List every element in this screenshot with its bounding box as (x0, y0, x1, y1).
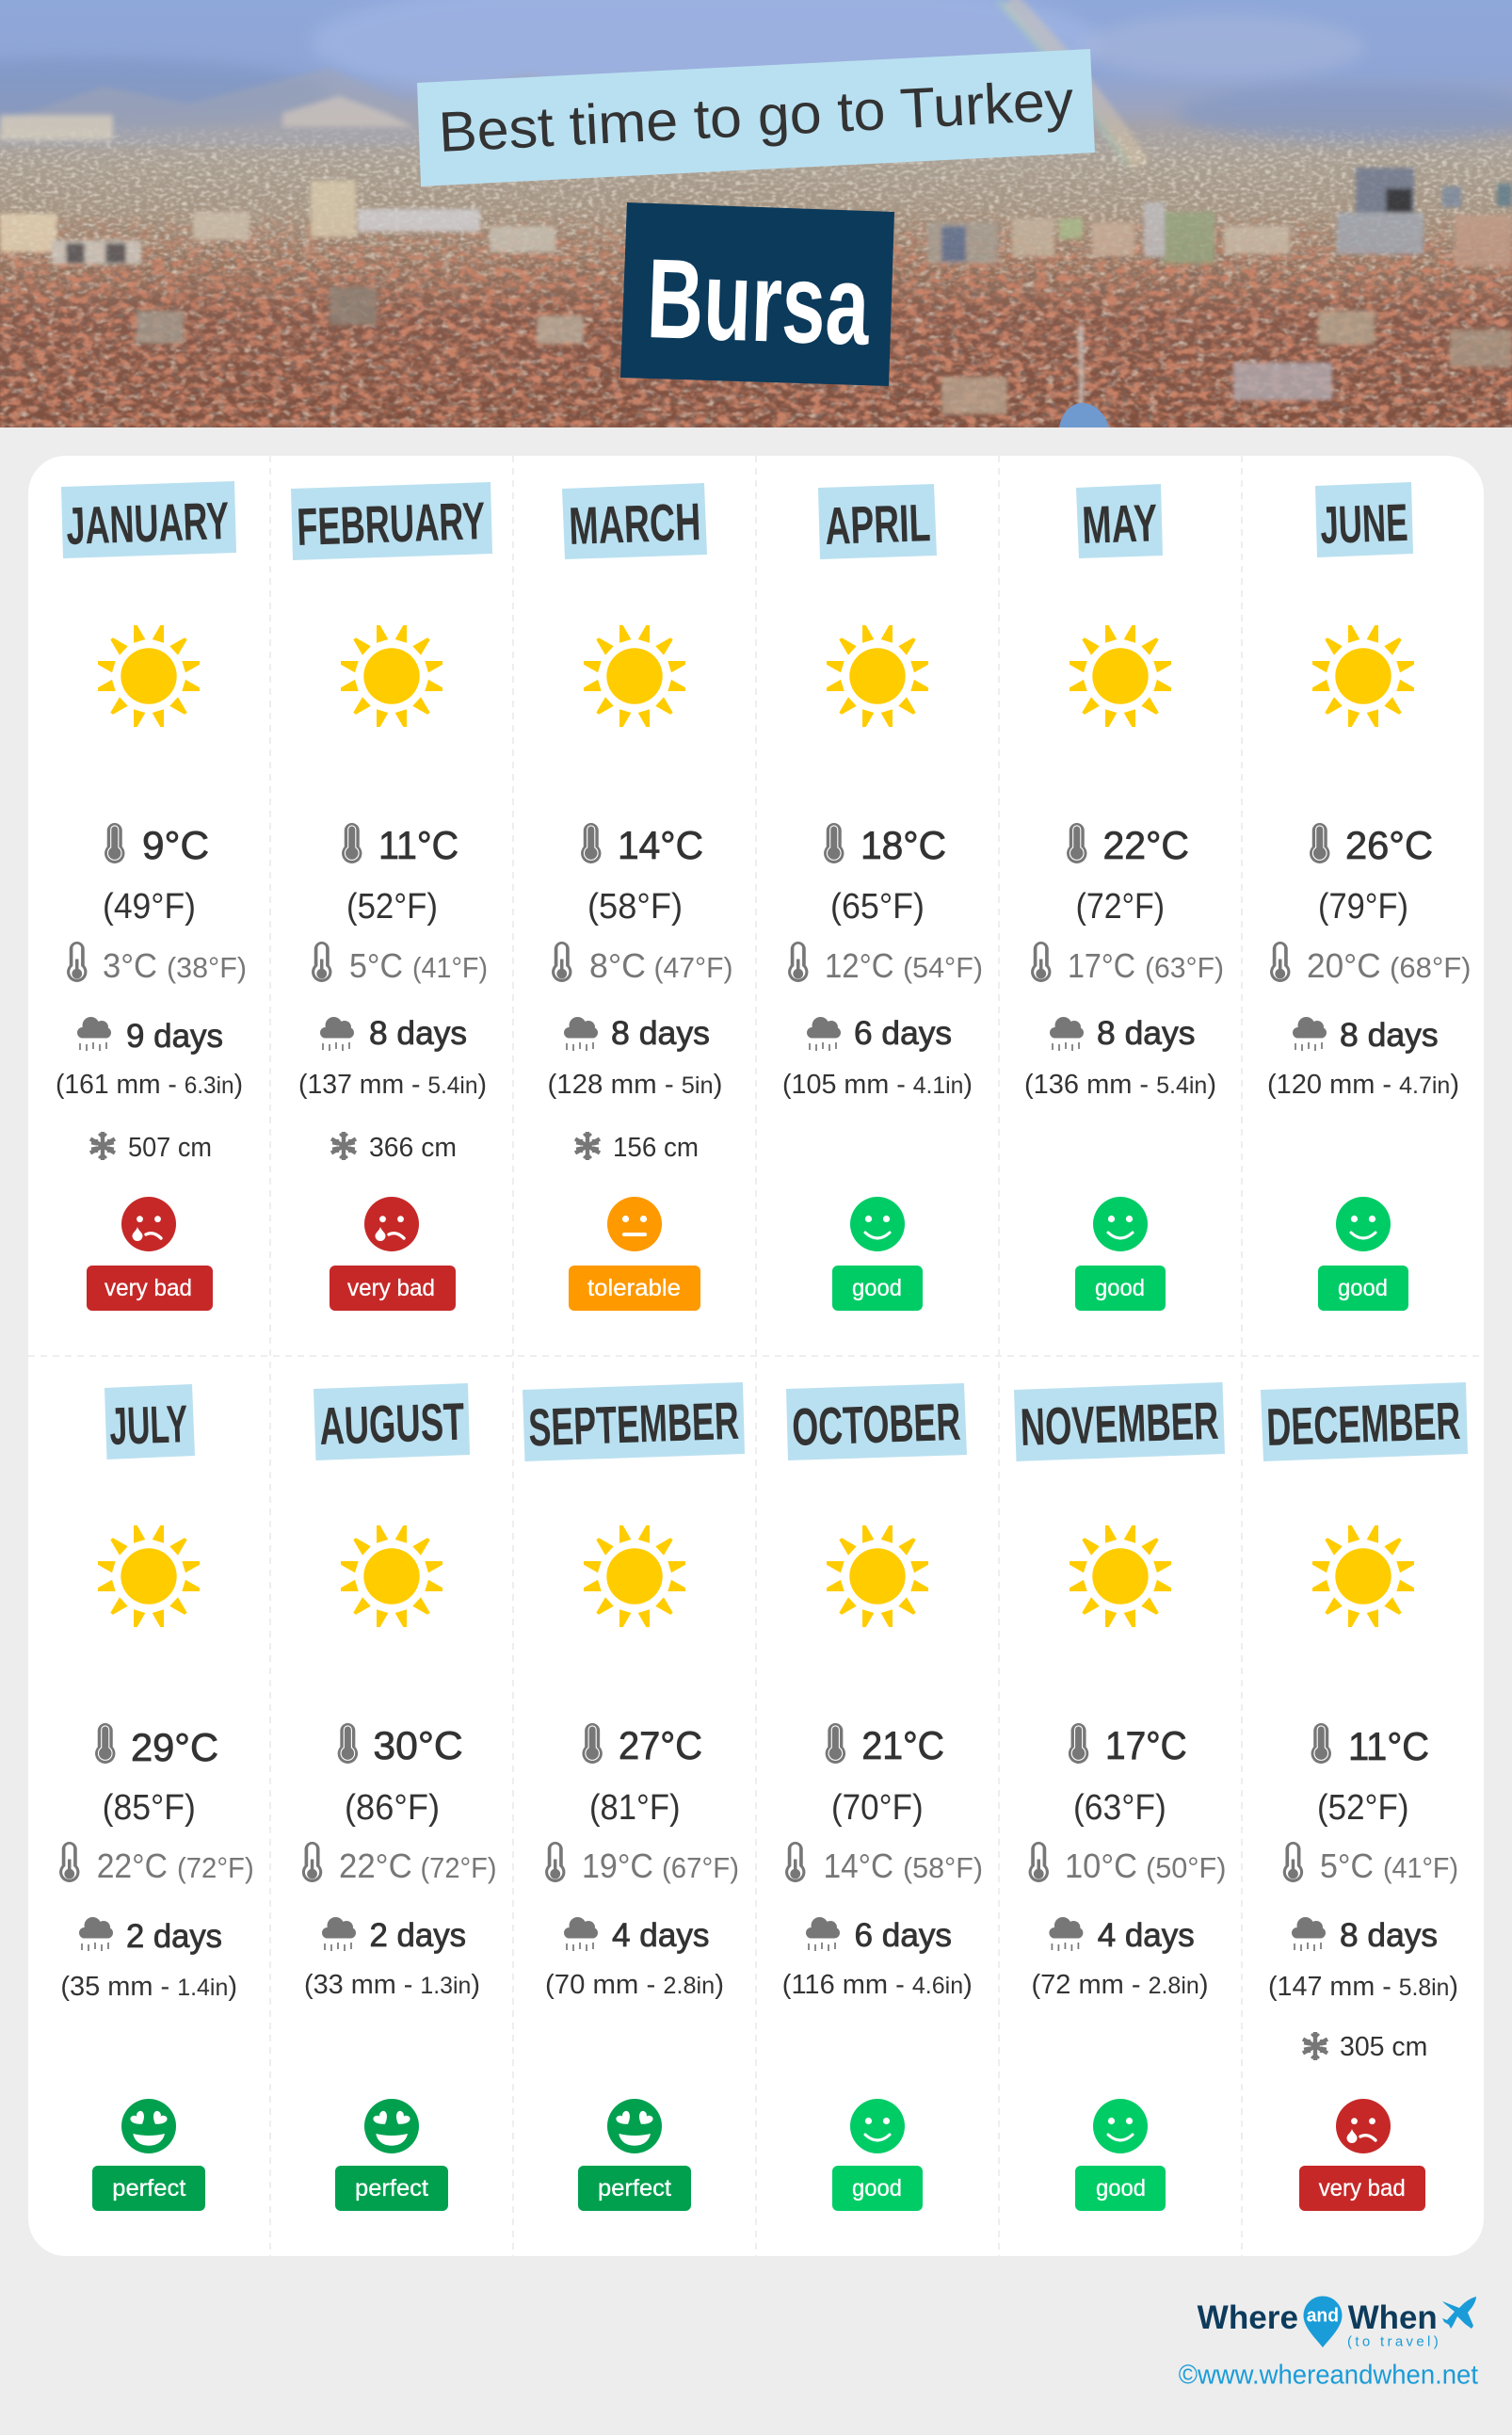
logo: Where and When: When (1348, 2299, 1438, 2336)
month label (61, 481, 236, 558)
high temperature fahrenheit: (86°F) (345, 1788, 440, 1828)
icon: thermometer low (545, 1842, 565, 1882)
icon: sun (584, 1525, 685, 1627)
icon: rain cloud (806, 1917, 840, 1951)
icon: heart-eyes face (121, 2099, 176, 2153)
icon: map pin (1303, 2296, 1343, 2347)
rating badge (832, 1266, 923, 1311)
rain days: 2 days (369, 1917, 466, 1954)
icon: sun (1070, 1525, 1171, 1627)
precipitation: (128 mm - 5in) (548, 1070, 723, 1100)
rating badge: good (852, 2175, 902, 2201)
icon: thermometer high (824, 823, 844, 863)
low temperature fahrenheit: (47°F) (653, 951, 732, 984)
rating badge: perfect (598, 2175, 671, 2201)
high temperature fahrenheit: (70°F) (831, 1788, 924, 1828)
icon: sun (341, 1525, 442, 1627)
precipitation: (136 mm - 5.4in) (1024, 1070, 1216, 1100)
month label (1014, 1382, 1225, 1461)
icon: crying face (121, 1197, 176, 1251)
icon: thermometer high (581, 823, 601, 863)
icon: thermometer low (1270, 942, 1290, 982)
icon: thermometer high (105, 823, 124, 863)
icon: rain cloud (807, 1017, 841, 1051)
high temperature: 22°C (1103, 823, 1189, 867)
rating badge (330, 1266, 456, 1311)
precipitation: (35 mm - 1.4in) (60, 1972, 237, 2002)
month label (1076, 484, 1163, 558)
panel: August (302, 1383, 497, 2211)
icon: snowflake (1303, 2032, 1327, 2060)
precipitation: (147 mm - 5.8in) (1268, 1972, 1458, 2002)
icon: smiling face (1093, 2099, 1148, 2153)
month label (523, 1382, 745, 1461)
precipitation: (72 mm - 2.8in) (1032, 1970, 1209, 2000)
month label: OCTOBER (791, 1392, 961, 1457)
month label (1315, 482, 1413, 557)
icon: thermometer low (302, 1842, 322, 1882)
high temperature: 18°C (861, 823, 946, 867)
panel: November (1014, 1382, 1226, 2211)
low temperature fahrenheit: (63°F) (1145, 951, 1224, 984)
rating badge (569, 1266, 700, 1311)
panel: June (1267, 482, 1471, 1311)
icon: thermometer high (95, 1723, 115, 1764)
precipitation: (70 mm - 2.8in) (545, 1970, 724, 2000)
icon: sun (1312, 625, 1414, 727)
panel: December (1261, 1382, 1468, 2211)
rating badge (1075, 2166, 1166, 2211)
icon: sun (98, 1525, 200, 1627)
high temperature: 9°C (142, 823, 209, 867)
rain days: 8 days (1340, 1017, 1439, 1054)
rain days: 8 days (1097, 1015, 1196, 1052)
icon: snowflake (90, 1132, 115, 1160)
logo: Where and When (1198, 2296, 1476, 2350)
high temperature fahrenheit: (49°F) (103, 887, 196, 927)
rain days: 9 days (126, 1018, 223, 1055)
month label (291, 482, 492, 560)
icon: sun (1312, 1525, 1414, 1627)
icon: snowflake (331, 1132, 356, 1160)
rain days: 8 days (611, 1015, 710, 1052)
icon: thermometer high (1067, 823, 1086, 863)
rain days: 4 days (612, 1917, 710, 1954)
month label: FEBRUARY (296, 491, 486, 556)
rating badge (92, 2166, 205, 2211)
low temperature: 8°C (589, 946, 646, 985)
rating badge: tolerable (587, 1275, 681, 1301)
rain days: 4 days (1098, 1917, 1195, 1954)
low temperature: 17°C (1068, 946, 1135, 985)
month label (786, 1383, 967, 1460)
rating badge: good (1096, 2175, 1146, 2201)
high temperature: 30°C (373, 1723, 463, 1767)
panel: July (59, 1384, 254, 2211)
low temperature fahrenheit: (68°F) (1390, 951, 1471, 984)
month label: JULY (108, 1394, 188, 1456)
precipitation: (116 mm - 4.6in) (782, 1970, 973, 2000)
icon: thermometer low (1029, 1842, 1049, 1882)
month label: JUNE (1319, 492, 1408, 555)
month label (314, 1383, 470, 1460)
panel: May (1024, 484, 1224, 1311)
precipitation: (120 mm - 4.7in) (1267, 1070, 1459, 1100)
low temperature fahrenheit: (38°F) (167, 951, 247, 984)
snowfall: 305 cm (1340, 2032, 1427, 2062)
icon: neutral face (607, 1197, 662, 1251)
icon: thermometer high (342, 823, 362, 863)
icon: rain cloud (564, 1017, 598, 1051)
city name banner (620, 202, 894, 386)
month label: NOVEMBER (1020, 1391, 1219, 1457)
rating badge: very bad (347, 1275, 435, 1301)
panel: climate calendar card (28, 456, 1484, 2256)
high temperature: 11°C (1348, 1724, 1429, 1768)
icon: rain cloud (1293, 1017, 1327, 1051)
icon: crying face (364, 1197, 419, 1251)
icon: sun (1070, 625, 1171, 727)
rain days: 2 days (126, 1918, 222, 1955)
low temperature fahrenheit: (41°F) (1383, 1851, 1458, 1884)
icon: thermometer low (67, 942, 87, 982)
icon: snowflake (575, 1132, 600, 1160)
icon: rain cloud (1292, 1917, 1326, 1951)
month label: MARCH (568, 492, 701, 556)
panel: April (782, 484, 983, 1311)
high temperature fahrenheit: (81°F) (589, 1788, 680, 1828)
low temperature fahrenheit: (50°F) (1146, 1851, 1226, 1884)
low temperature: 19°C (582, 1846, 653, 1885)
precipitation: (33 mm - 1.3in) (304, 1970, 480, 2000)
title text: Best time to go to Turkey (437, 69, 1075, 164)
icon: thermometer low (1283, 1842, 1303, 1882)
low temperature: 5°C (1320, 1846, 1374, 1885)
high temperature: 17°C (1105, 1723, 1187, 1767)
rating badge: good (1338, 1275, 1388, 1301)
high temperature: 21°C (861, 1723, 944, 1767)
panel: October (782, 1383, 983, 2211)
month label: MAY (1081, 492, 1158, 555)
rating badge: good (852, 1275, 902, 1301)
snowfall: 366 cm (369, 1133, 457, 1163)
icon: heart-eyes face (607, 2099, 662, 2153)
icon: smiling face (850, 1197, 905, 1251)
icon: plane (1442, 2297, 1476, 2329)
low temperature: 22°C (339, 1846, 412, 1885)
rain days: 6 days (855, 1917, 952, 1954)
high temperature fahrenheit: (79°F) (1318, 887, 1408, 927)
icon: sun (584, 625, 685, 727)
rating badge (578, 2166, 691, 2211)
title banner (417, 49, 1095, 186)
icon: smiling face (850, 2099, 905, 2153)
icon: sun (827, 625, 928, 727)
rating badge: good (1095, 1275, 1145, 1301)
icon: rain cloud (564, 1917, 598, 1951)
icon: thermometer high (582, 1723, 603, 1764)
panel: February (291, 482, 492, 1311)
month label (562, 483, 707, 559)
icon: thermometer low (312, 942, 331, 982)
icon: thermometer low (788, 942, 808, 982)
icon: thermometer low (552, 942, 571, 982)
icon: rain cloud (77, 1017, 111, 1051)
rating badge (335, 2166, 448, 2211)
website credit: ©www.whereandwhen.net (1179, 2361, 1478, 2391)
icon: thermometer high (338, 1723, 358, 1764)
precipitation: (137 mm - 5.4in) (298, 1070, 487, 1100)
low temperature: 22°C (97, 1846, 168, 1885)
rating badge (1318, 1266, 1408, 1311)
low temperature fahrenheit: (58°F) (903, 1851, 983, 1884)
icon: thermometer high (826, 1723, 845, 1764)
header photo of Bursa (0, 0, 1512, 427)
high temperature fahrenheit: (58°F) (587, 887, 683, 927)
high temperature fahrenheit: (72°F) (1076, 887, 1165, 927)
precipitation: (161 mm - 6.3in) (56, 1070, 243, 1100)
low temperature: 14°C (824, 1846, 893, 1885)
high temperature fahrenheit: (65°F) (830, 887, 925, 927)
low temperature fahrenheit: (54°F) (903, 951, 983, 984)
icon: rain cloud (320, 1017, 354, 1051)
high temperature fahrenheit: (85°F) (103, 1788, 196, 1828)
snowfall: 507 cm (128, 1133, 212, 1163)
icon: thermometer low (1031, 942, 1051, 982)
city name: Bursa (645, 235, 872, 369)
month label: AUGUST (318, 1392, 465, 1456)
rating badge (832, 2166, 923, 2211)
logo: Where and When: Where (1198, 2299, 1298, 2336)
month label (818, 484, 937, 559)
icon: smiling face (1336, 1197, 1391, 1251)
icon: sun (827, 1525, 928, 1627)
rating badge: very bad (105, 1275, 192, 1301)
icon: thermometer high (1311, 1723, 1331, 1764)
high temperature: 27°C (619, 1723, 702, 1767)
icon: smiling face (1093, 1197, 1148, 1251)
low temperature fahrenheit: (67°F) (662, 1851, 739, 1884)
low temperature fahrenheit: (41°F) (412, 951, 488, 984)
rain days: 6 days (854, 1015, 952, 1052)
icon: heart-eyes face (364, 2099, 419, 2153)
high temperature: 11°C (378, 823, 458, 867)
low temperature: 12°C (825, 946, 894, 985)
rain days: 8 days (369, 1015, 467, 1052)
panel: January (56, 481, 247, 1311)
icon: thermometer low (785, 1842, 805, 1882)
icon: rain cloud (1049, 1917, 1083, 1951)
high temperature: 29°C (131, 1725, 218, 1769)
low temperature: 3°C (103, 946, 157, 985)
icon: thermometer high (1310, 823, 1329, 863)
rain days: 8 days (1340, 1917, 1438, 1954)
month label: APRIL (824, 492, 931, 556)
low temperature: 5°C (349, 946, 403, 985)
month label: JANUARY (65, 491, 230, 556)
rating badge (1299, 2166, 1425, 2211)
rating badge (87, 1266, 213, 1311)
rating badge: perfect (355, 2175, 428, 2201)
snowfall: 156 cm (613, 1133, 699, 1163)
low temperature: 10°C (1065, 1846, 1137, 1885)
rating badge: perfect (112, 2175, 185, 2201)
low temperature fahrenheit: (72°F) (420, 1851, 497, 1884)
precipitation: (105 mm - 4.1in) (782, 1070, 973, 1100)
high temperature: 14°C (618, 823, 703, 867)
month label: SEPTEMBER (527, 1391, 740, 1457)
month label (105, 1384, 195, 1459)
icon: sun (98, 625, 200, 727)
icon: rain cloud (79, 1917, 113, 1951)
low temperature: 20°C (1307, 946, 1381, 985)
icon: rain cloud (322, 1917, 356, 1951)
rating badge: very bad (1319, 2175, 1406, 2201)
rating badge (1075, 1266, 1166, 1311)
icon: sun (341, 625, 442, 727)
high temperature fahrenheit: (52°F) (1317, 1788, 1408, 1828)
panel: March (548, 483, 732, 1311)
high temperature fahrenheit: (52°F) (346, 887, 438, 927)
icon: crying face (1336, 2099, 1391, 2153)
low temperature fahrenheit: (72°F) (177, 1851, 254, 1884)
logo: Where and When: and (1307, 2306, 1339, 2327)
icon: thermometer low (59, 1842, 79, 1882)
panel: September (523, 1382, 745, 2211)
icon: rain cloud (1050, 1017, 1084, 1051)
high temperature fahrenheit: (63°F) (1073, 1788, 1166, 1828)
logo: Where and When: (to travel) (1347, 2334, 1439, 2350)
icon: thermometer high (1069, 1723, 1088, 1764)
high temperature: 26°C (1345, 823, 1433, 867)
